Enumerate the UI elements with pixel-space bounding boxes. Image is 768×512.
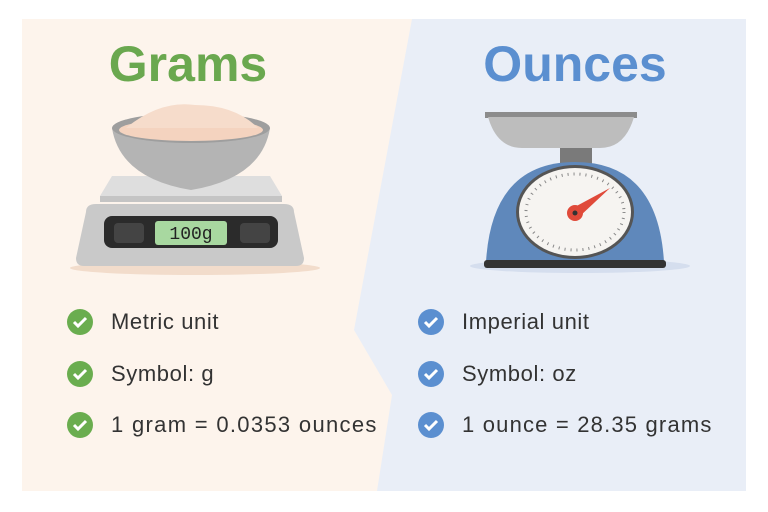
item: metric unit: Metric unit xyxy=(111,309,219,334)
icon: digital scale with bowl: 100g xyxy=(169,225,213,245)
icon: mechanical dial scale xyxy=(470,112,690,273)
item: imperial unit: Imperial unit xyxy=(462,309,590,334)
item: conversion: 1 ounce = 28.35 grams xyxy=(462,412,712,437)
item: symbol oz xyxy=(418,361,577,387)
icon: digital scale with bowl xyxy=(70,104,320,275)
item: conversion: 1 gram = 0.0353 ounces xyxy=(111,412,377,437)
title: Ounces: Ounces xyxy=(483,36,667,92)
item: symbol g xyxy=(67,361,214,387)
item: symbol g: Symbol: g xyxy=(111,361,214,386)
list: grams facts xyxy=(67,309,377,438)
panel: grams background xyxy=(22,19,412,491)
title: Grams: Grams xyxy=(109,36,267,92)
list: ounces facts xyxy=(418,309,712,438)
item: metric unit xyxy=(67,309,219,335)
item: symbol oz: Symbol: oz xyxy=(462,361,577,386)
